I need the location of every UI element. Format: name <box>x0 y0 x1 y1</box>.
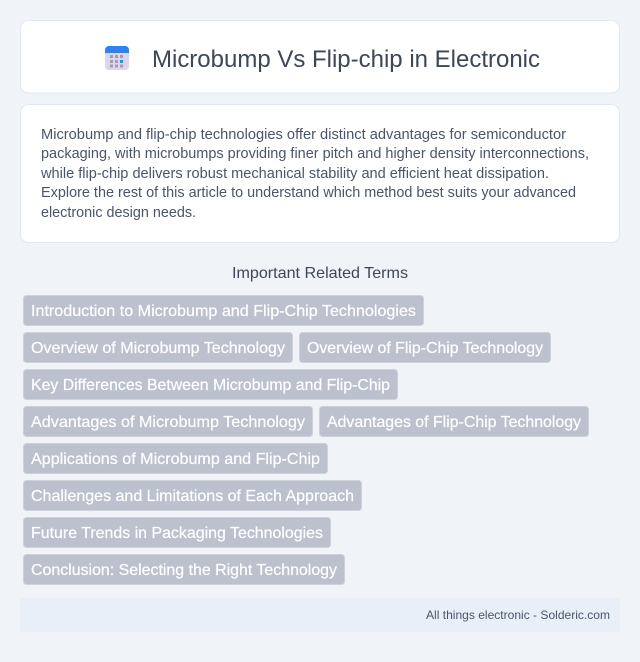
text block: intro: packaging, with microbumps providing finer pitch and higher density interconnections, <box>41 146 589 162</box>
tag: key differences: Key Differences Between Microbump and Flip-Chip <box>31 377 390 394</box>
tag: overview microbump <box>24 332 292 362</box>
icon: calendar <box>105 46 129 70</box>
footer credit: All things electronic - Solderic.com <box>426 608 610 622</box>
tag: advantages flip-chip <box>320 406 588 436</box>
text block: intro: while flip-chip delivers robust mechanical stability and efficient heat dissipation. <box>40 166 549 182</box>
title: Microbump Vs Flip-chip in Electronic <box>152 46 540 73</box>
tag: applications <box>24 444 328 474</box>
tag: future trends <box>24 518 330 548</box>
text block: intro: Explore the rest of this article to understand which method best suits your advanced <box>41 185 576 201</box>
heading: related terms: Important Related Terms <box>232 265 408 282</box>
tag: key differences <box>24 370 398 400</box>
tag: overview flip-chip <box>300 332 550 362</box>
text block: intro: Microbump and flip-chip technologies offer distinct advantages for semiconductor <box>41 127 566 143</box>
tag: challenges: Challenges and Limitations of Each Approach <box>31 488 354 505</box>
tag: applications: Applications of Microbump and Flip-Chip <box>31 451 320 468</box>
tag: introduction: Introduction to Microbump and Flip-Chip Technologies <box>31 303 416 320</box>
tag: advantages flip-chip: Advantages of Flip-Chip Technology <box>327 414 581 431</box>
tag: overview flip-chip: Overview of Flip-Chip Technology <box>307 340 543 357</box>
tag: future trends: Future Trends in Packaging Technologies <box>31 525 323 542</box>
panel: header card <box>20 20 620 93</box>
tag: advantages microbump: Advantages of Microbump Technology <box>31 414 305 431</box>
footer <box>20 598 620 632</box>
tag list <box>24 296 588 584</box>
tag: advantages microbump <box>24 406 312 436</box>
tag: conclusion <box>24 554 344 584</box>
text block: intro <box>40 127 589 221</box>
panel: intro paragraph <box>20 104 620 242</box>
tag: conclusion: Conclusion: Selecting the Right Technology <box>31 562 337 579</box>
tag: introduction <box>24 296 424 326</box>
tag: challenges <box>24 480 362 510</box>
tag: overview microbump: Overview of Microbump Technology <box>31 340 285 357</box>
text block: intro: electronic design needs. <box>41 205 196 221</box>
